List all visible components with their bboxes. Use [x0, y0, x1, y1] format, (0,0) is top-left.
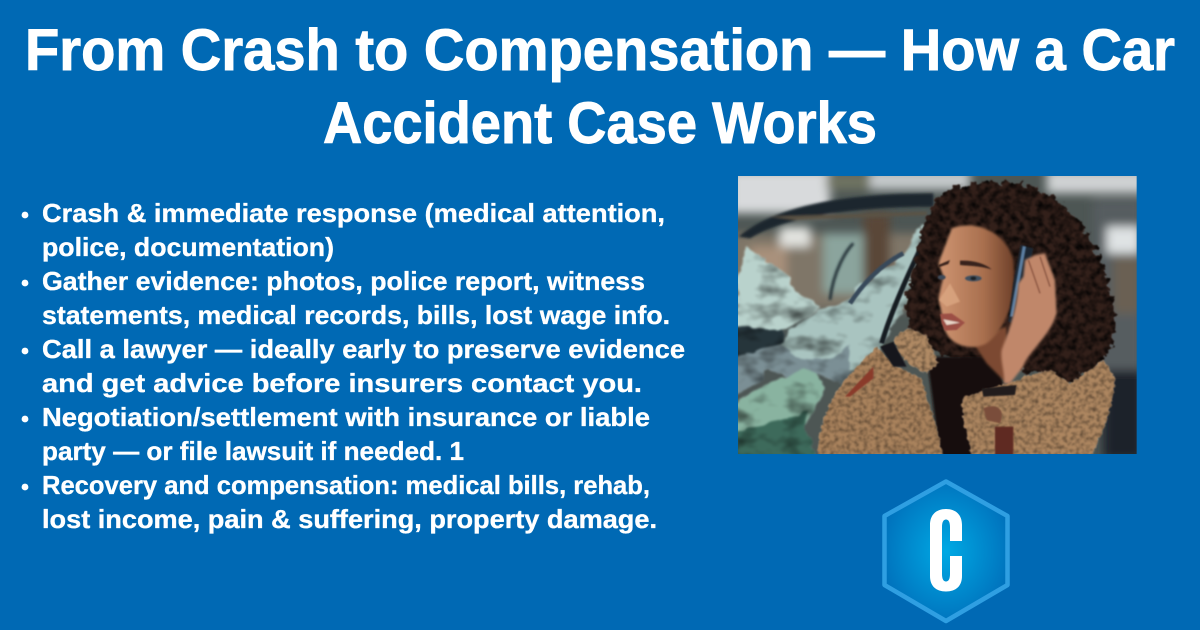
bullet: crash and immediate response: Crash & immediate response (medical attention, [42, 198, 665, 228]
photo: woman on phone beside a crashed car [730, 170, 1147, 460]
crumpled metal [733, 220, 930, 460]
bullet: negotiation or lawsuit: party — or file lawsuit if needed. 1 [42, 436, 464, 466]
logo letter [930, 509, 962, 592]
bullet: call a lawyer: Call a lawyer — ideally early to preserve evidence [42, 334, 685, 364]
bullet: gather evidence [22, 266, 670, 330]
hair [905, 181, 1115, 383]
lips [940, 313, 965, 331]
face [938, 225, 1014, 347]
bullet: call a lawyer [22, 334, 685, 398]
coat [817, 329, 1115, 460]
eyebrows [938, 260, 950, 267]
bullet: recovery and compensation: lost income, pain & suffering, property damage. [42, 504, 657, 534]
bullet: gather evidence: statements, medical records, bills, lost wage info. [42, 300, 670, 330]
bullet: negotiation or lawsuit [22, 402, 650, 466]
dark window trim [739, 193, 933, 238]
eyes [938, 275, 946, 280]
logo: hexagon with letter C [884, 482, 1008, 621]
title: From Crash to Compensation — How a Car [25, 18, 1175, 83]
bullet list [22, 198, 685, 534]
bullet: call a lawyer: and get advice before insurers contact you. [42, 368, 642, 398]
bullet: crash and immediate response: police, documentation) [42, 232, 334, 262]
dark shirt [927, 357, 1007, 457]
title [25, 18, 1175, 156]
bullet: gather evidence: Gather evidence: photos, police report, witness [42, 266, 645, 296]
title: Accident Case Works [323, 91, 877, 156]
bullet: recovery and compensation [22, 470, 657, 534]
nose highlight [939, 283, 960, 307]
phone [1008, 245, 1033, 324]
neck [970, 327, 1007, 383]
coat stains [845, 367, 873, 397]
bullet: recovery and compensation: Recovery and compensation: medical bills, rehab, [42, 470, 650, 500]
bullet: negotiation or lawsuit: Negotiation/settlement with insurance or liable [42, 402, 650, 432]
hand [1001, 253, 1057, 383]
bullet: crash and immediate response [22, 198, 665, 262]
